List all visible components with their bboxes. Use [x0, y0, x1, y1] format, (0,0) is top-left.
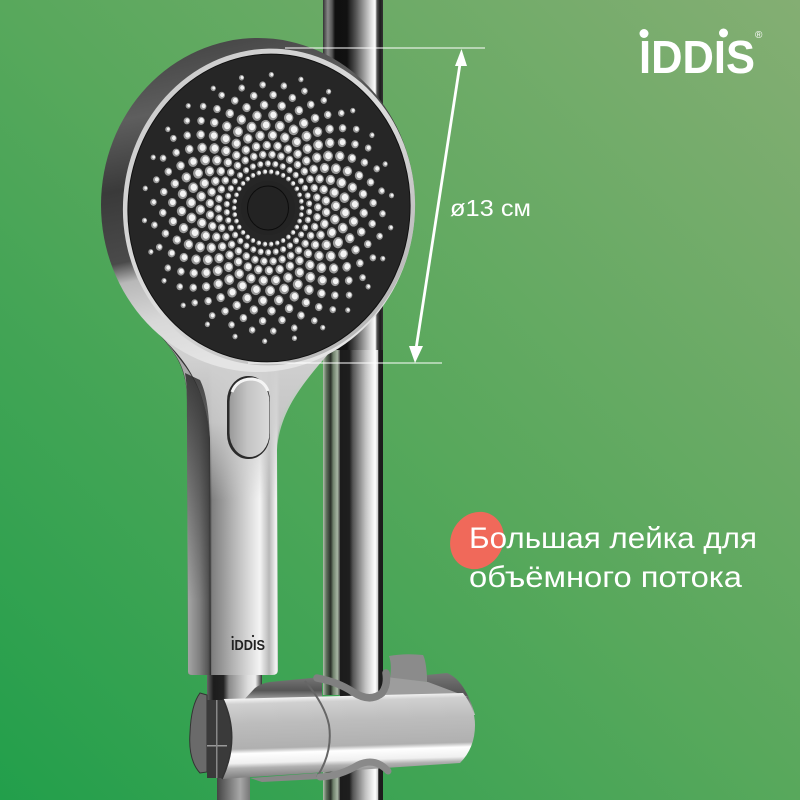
brand logo: ® — [755, 30, 763, 41]
clamp body — [222, 693, 475, 779]
knob — [378, 654, 468, 702]
caption: Большая лейка для — [469, 522, 757, 555]
brand logo: IDDIS — [639, 31, 755, 83]
rail clamp — [190, 654, 475, 800]
clamp left end cap — [222, 699, 232, 779]
clamp ring — [305, 681, 330, 777]
spray nozzles — [93, 20, 443, 396]
icon: handle spray button — [227, 376, 270, 459]
bottom guide line — [248, 362, 442, 364]
handle logo: IDDIS — [231, 637, 265, 654]
head chrome rim — [110, 36, 428, 378]
pipe below handle — [207, 675, 262, 710]
accent red blob — [440, 502, 514, 579]
head back shell — [101, 38, 415, 372]
head black spray face — [115, 42, 423, 374]
center button — [241, 181, 295, 235]
clamp upper back bar, left of rail — [240, 677, 322, 704]
diameter label: ø13 см — [450, 195, 531, 221]
dimension marker — [248, 48, 531, 364]
gray lower strap — [320, 762, 388, 777]
pipe below clamp — [217, 770, 250, 800]
top guide line — [285, 48, 485, 49]
clamp upper back bar, right of knob — [427, 673, 475, 715]
hand shower handle — [160, 335, 345, 675]
arrow: diameter — [409, 49, 467, 363]
caption — [469, 522, 757, 594]
shower head — [93, 20, 443, 396]
sliding rail — [323, 0, 383, 800]
gray upper strap — [317, 673, 386, 698]
clamp lower plate — [250, 773, 320, 782]
caption: объёмного потока — [469, 561, 742, 594]
clamp side wheel — [190, 693, 235, 778]
